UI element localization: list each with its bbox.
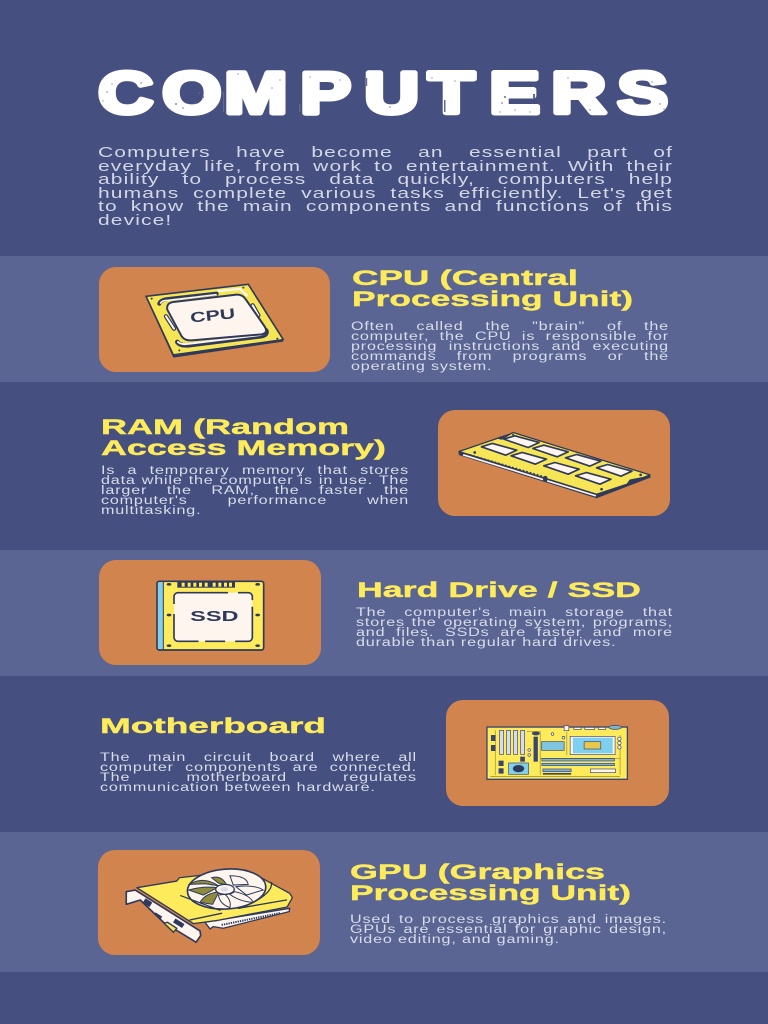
GPU heading: GPU (Graphics — [350, 861, 605, 884]
GPU description: GPUs are essential for graphic design, — [350, 924, 667, 936]
CPU heading — [352, 267, 633, 311]
panel: Hard Drive / SSD — [0, 550, 768, 676]
CPU heading: Processing Unit) — [352, 288, 633, 311]
GPU description: video editing, and gaming. — [350, 934, 560, 946]
Motherboard description: The main circuit board where all — [100, 752, 417, 764]
RAM heading: Access Memory) — [101, 437, 386, 460]
CPU description — [351, 321, 669, 373]
GPU image card — [98, 850, 320, 955]
CPU heading: CPU (Central — [352, 267, 578, 290]
CPU description: operating system. — [351, 361, 492, 373]
RAM description: computer's performance when — [101, 495, 409, 507]
Hard Drive description: stores the operating system, programs, — [356, 617, 673, 629]
panel: CPU — [0, 256, 768, 382]
RAM heading — [101, 416, 386, 460]
panel: Motherboard — [100, 700, 669, 806]
intro text: device! — [98, 212, 172, 228]
intro text: ability to process data quickly, computers help — [98, 171, 673, 188]
panel: RAM — [101, 410, 670, 517]
panel: GPU — [0, 832, 768, 972]
CPU description: computer, the CPU is responsible for — [351, 331, 669, 343]
Hard Drive description: and files. SSDs are faster and more — [356, 627, 673, 639]
Hard Drive description: durable than regular hard drives. — [356, 637, 616, 649]
Motherboard heading: Motherboard — [100, 715, 326, 738]
Hard Drive heading: Hard Drive / SSD — [357, 579, 641, 602]
icon: CPU chip: CPU — [190, 306, 236, 327]
CPU description: commands from programs or the — [351, 351, 669, 363]
icon: RAM stick — [458, 432, 651, 498]
RAM description: multitasking. — [101, 505, 201, 517]
icon: motherboard — [486, 725, 628, 780]
RAM image card — [438, 410, 670, 516]
title: COMPUTERS — [99, 61, 668, 126]
CPU image card — [99, 267, 330, 372]
intro text: to know the main components and functions of this — [98, 198, 673, 215]
GPU heading: Processing Unit) — [350, 882, 631, 905]
CPU description: Often called the "brain" of the — [351, 321, 669, 333]
GPU heading — [350, 861, 631, 905]
RAM description: larger the RAM, the faster the — [101, 485, 409, 497]
SSD image card — [99, 560, 321, 665]
Motherboard description — [100, 752, 417, 794]
RAM description: data while the computer is in use. The — [101, 475, 409, 487]
CPU description: processing instructions and executing — [351, 341, 669, 353]
Motherboard description: computer components are connected. — [100, 762, 417, 774]
icon: SSD: SSD — [190, 608, 239, 625]
icon: CPU chip — [145, 284, 284, 358]
GPU description: Used to process graphics and images. — [350, 914, 667, 926]
Hard Drive description — [356, 607, 673, 649]
intro text: everyday life, from work to entertainment. With their — [98, 158, 673, 174]
GPU description — [350, 914, 667, 946]
Motherboard description: communication between hardware. — [100, 782, 376, 794]
Hard Drive description: The computer's main storage that — [356, 607, 673, 619]
intro text — [98, 144, 673, 228]
icon: SSD — [156, 580, 264, 651]
RAM description: Is a temporary memory that stores — [101, 465, 409, 477]
RAM heading: RAM (Random — [101, 416, 349, 439]
RAM description — [101, 465, 409, 517]
intro text: humans complete various tasks efficiently. Let's get — [98, 184, 673, 202]
intro text: Computers have become an essential part of — [98, 144, 673, 161]
Motherboard image card — [446, 700, 669, 806]
icon: graphics card — [125, 868, 294, 944]
Motherboard description: The motherboard regulates — [100, 772, 417, 784]
